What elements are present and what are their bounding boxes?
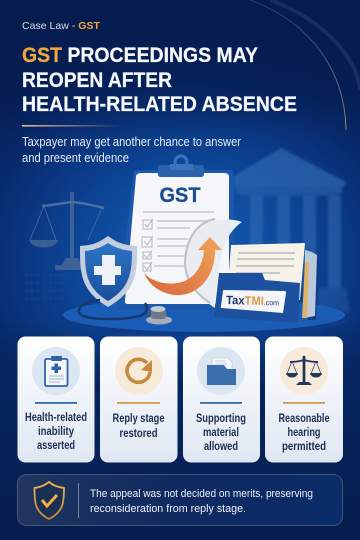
card 1 label: inability	[38, 426, 74, 438]
card 2	[100, 336, 178, 462]
card 4 label	[278, 413, 330, 453]
callout text: reconsideration from reply stage.	[90, 503, 246, 515]
icon: scales	[280, 347, 328, 395]
subtitle: and present evidence	[22, 151, 129, 165]
icon: gold shield check	[34, 482, 64, 519]
card 2 label: Reply stage	[112, 413, 164, 425]
illustration: dots	[25, 274, 63, 300]
card 2 label: restored	[120, 428, 158, 440]
card 3	[183, 336, 260, 462]
illustration: background scales	[29, 192, 104, 270]
icon: refresh arrow	[115, 347, 163, 395]
card 3 label: Supporting	[196, 413, 246, 425]
title	[22, 44, 297, 116]
card 3 label: allowed	[204, 441, 238, 453]
card 4	[265, 336, 343, 462]
illustration: clipboard	[117, 156, 234, 310]
subtitle: Taxpayer may get another chance to answer	[22, 135, 241, 149]
illustration: podium	[61, 298, 347, 336]
callout text: The appeal was not decided on merits, preserving	[90, 488, 313, 500]
card 4 label: Reasonable	[278, 413, 330, 425]
title: GST PROCEEDINGS MAY	[22, 44, 258, 67]
illustration: curved page with arrow	[144, 219, 242, 308]
title rule	[22, 125, 122, 127]
title: REOPEN AFTER	[22, 69, 172, 92]
logo plate: TaxTMI.com	[226, 293, 279, 308]
subtitle	[22, 135, 241, 165]
title: HEALTH-RELATED ABSENCE	[22, 93, 297, 116]
icon: folder	[197, 347, 245, 395]
icon: medical clipboard	[32, 347, 80, 395]
illustration: medical shield	[80, 236, 137, 307]
illustration: stethoscope	[79, 300, 172, 324]
illustration: courthouse	[234, 148, 350, 312]
card 1 label	[25, 412, 87, 452]
card 2 label	[112, 413, 164, 440]
callout panel	[18, 474, 342, 526]
card 1	[18, 336, 94, 462]
card 3 label	[196, 413, 246, 453]
illustration: folder with documents	[214, 243, 319, 323]
eyebrow label: Case Law - GST	[22, 20, 101, 32]
callout text	[90, 488, 313, 515]
card 1 label: Health-related	[25, 412, 87, 424]
clipboard heading: GST	[160, 184, 201, 207]
card 1 label: asserted	[37, 440, 75, 452]
card 3 label: material	[203, 427, 239, 439]
card 4 label: hearing	[288, 427, 320, 439]
card 4 label: permitted	[282, 441, 326, 453]
